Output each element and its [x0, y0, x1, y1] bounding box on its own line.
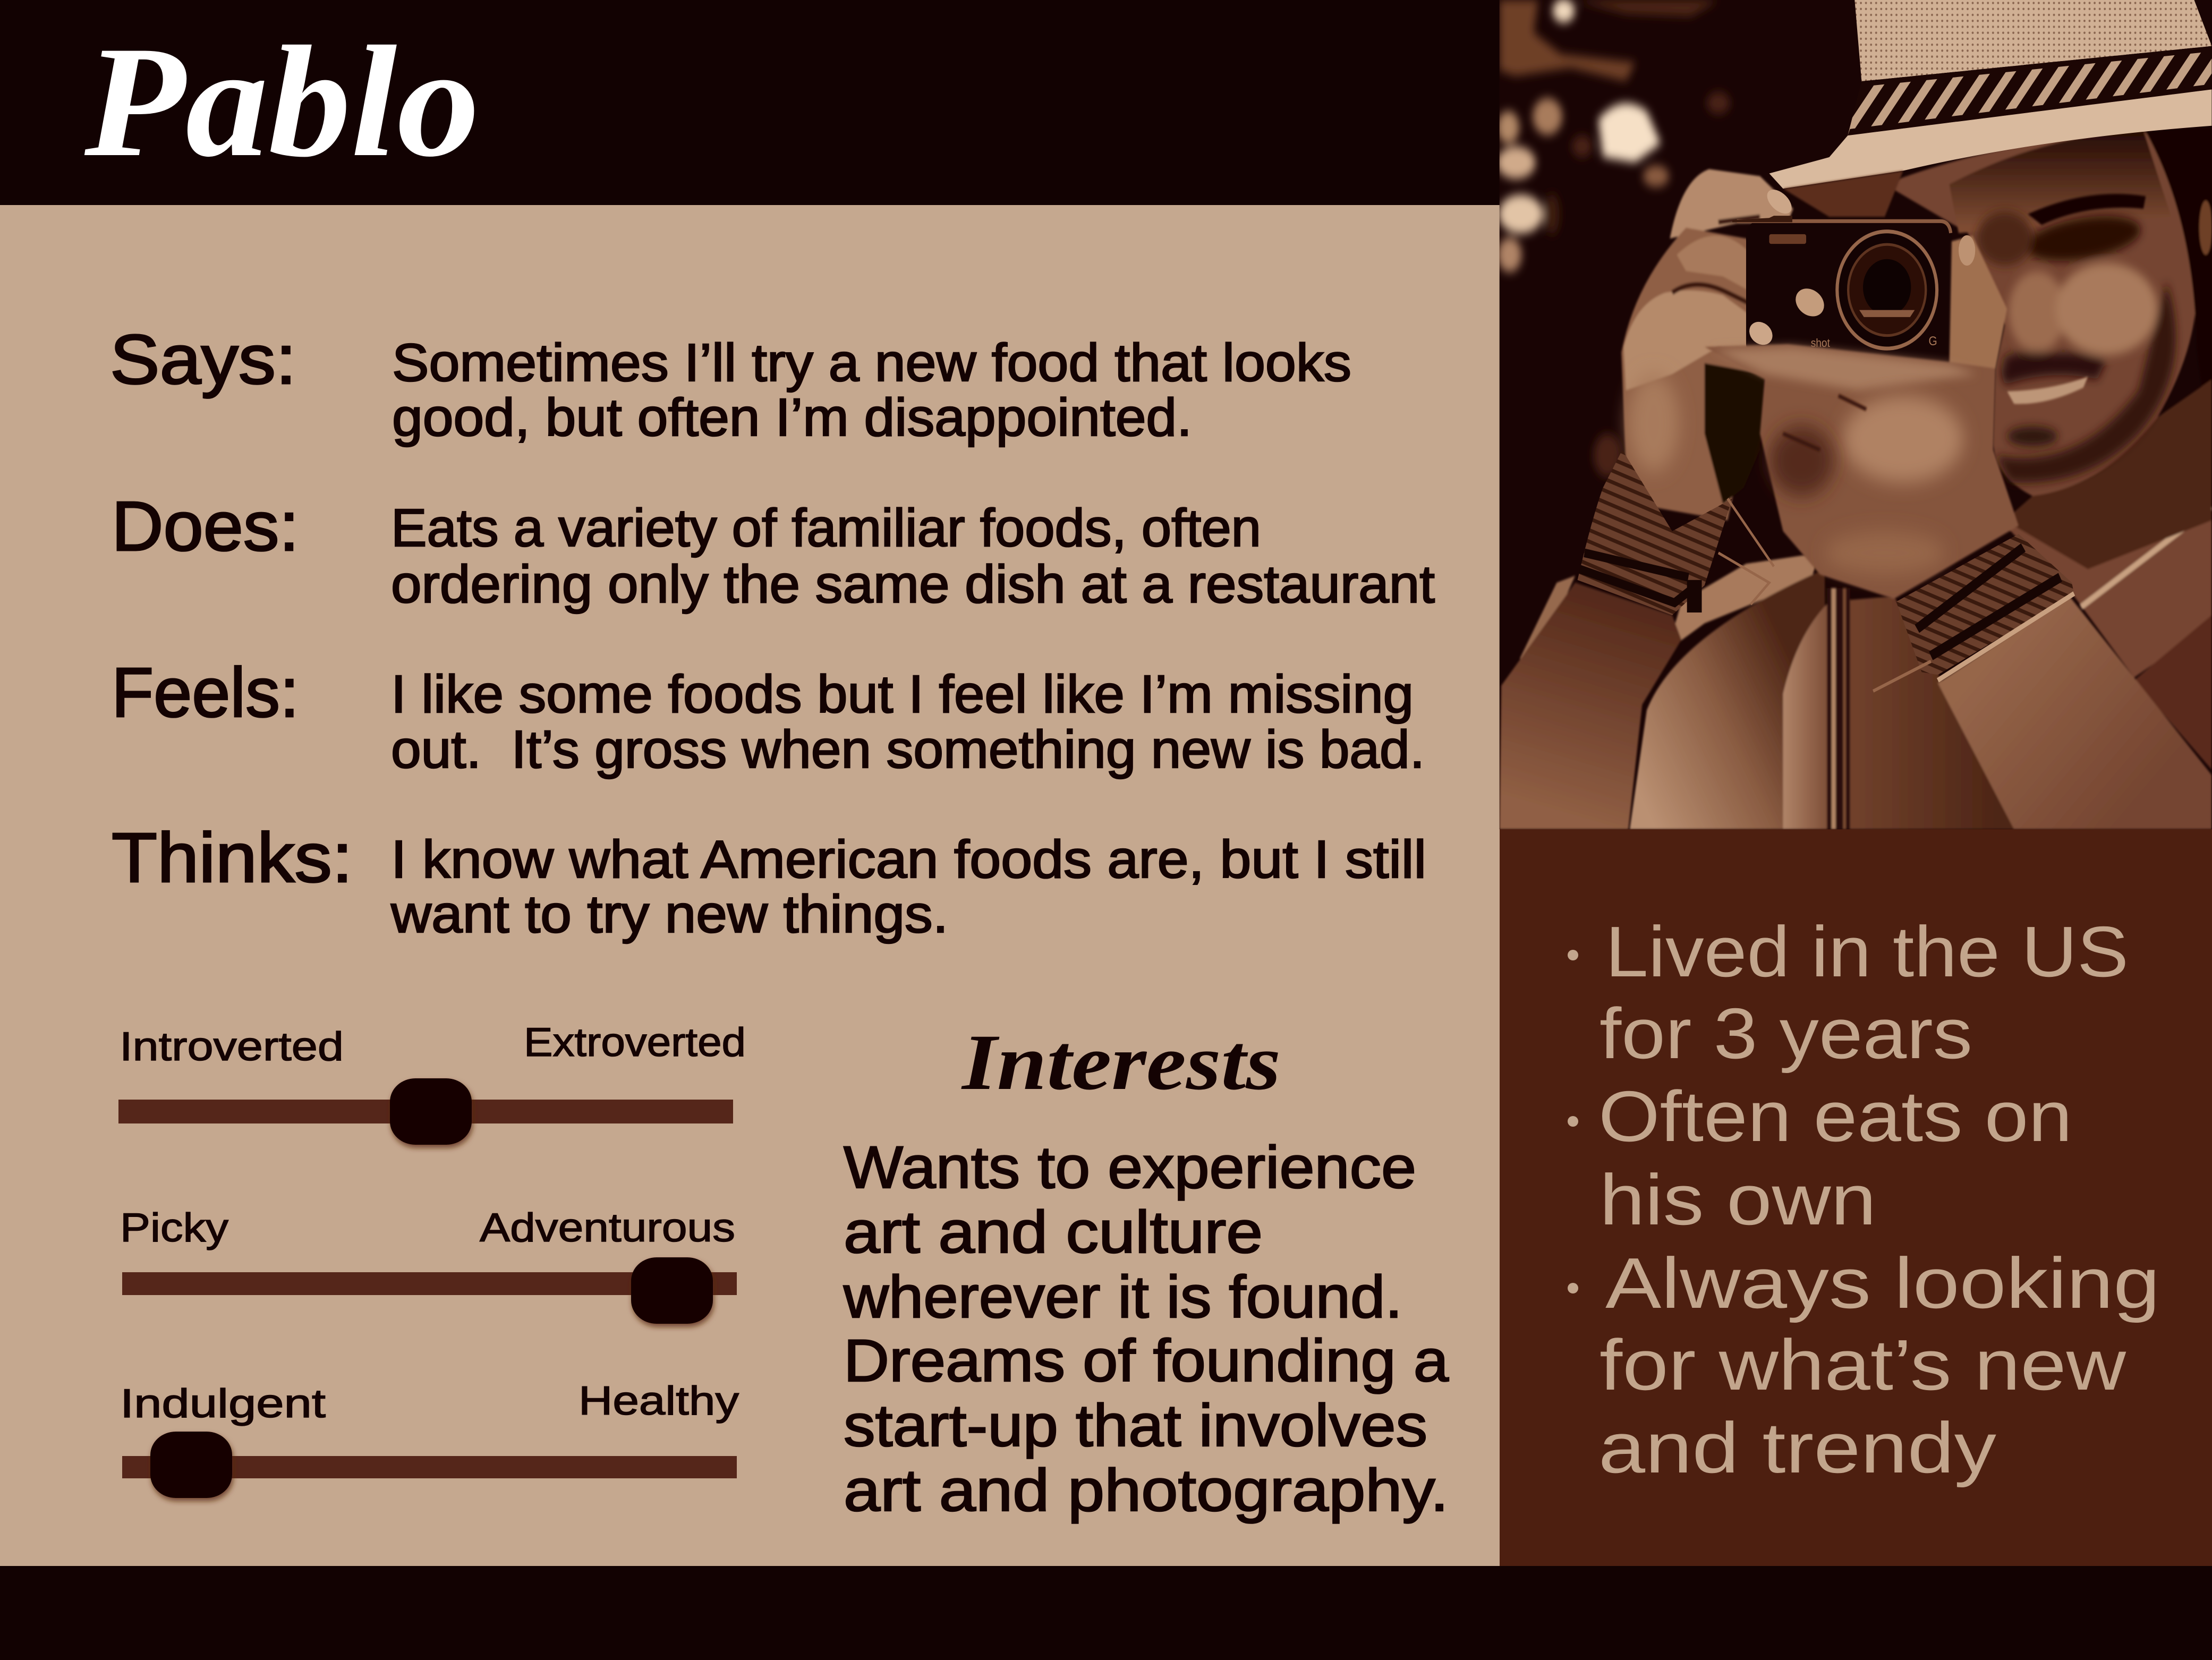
text: thinks: I know what American foods are, but I still [391, 830, 1426, 889]
slider handle: introverted to extroverted [390, 1078, 472, 1145]
bullet: new and trendy: and trendy [1598, 1408, 1997, 1488]
slider: picky to adventurous [120, 1205, 737, 1324]
text: does: Eats a variety of familiar foods, often [391, 498, 1261, 558]
bullet: new and trendy: Always looking [1605, 1243, 2160, 1323]
hands and camera: shot [1811, 337, 1830, 350]
bullet: eats on his own: his own [1600, 1160, 1876, 1240]
slider: introverted to extroverted: Introverted [120, 1024, 344, 1069]
bullet: eats on his own [1568, 1076, 2072, 1240]
text: interests: Wants to experience [844, 1134, 1416, 1201]
hat [1769, 0, 2212, 217]
text: feels: I like some foods but I feel like I’m missing [391, 665, 1414, 724]
bracelets [1578, 450, 2074, 691]
title: Pablo [82, 13, 480, 190]
slider handle: indulgent to healthy [150, 1432, 232, 1498]
slider handle: picky to adventurous [631, 1257, 713, 1324]
footer band [0, 1566, 2212, 1660]
slider: indulgent to healthy: Indulgent [120, 1381, 326, 1426]
panel: does [112, 487, 1435, 614]
hands and camera [1621, 169, 2019, 599]
bullet: new and trendy [1568, 1243, 2160, 1488]
panel: main content [0, 205, 1500, 1566]
text: thinks [390, 830, 1426, 944]
bullet: eats on his own: Often eats on [1598, 1076, 2072, 1156]
bullet: lived in the US [1568, 912, 2129, 1074]
panel: says [110, 320, 1351, 447]
header band [0, 0, 1500, 205]
slider: picky to adventurous: Picky [120, 1205, 228, 1250]
slider: picky to adventurous: Adventurous [480, 1205, 735, 1250]
bullet: lived in the US: for 3 years [1600, 993, 1972, 1074]
text: says: Sometimes I’ll try a new food that looks [392, 333, 1351, 393]
panel: feels [112, 653, 1425, 779]
heading: feels: Feels: [112, 653, 299, 731]
text: interests: wherever it is found. [843, 1264, 1402, 1330]
panel: thinks [112, 819, 1426, 944]
hands and camera: G [1928, 333, 1937, 348]
heading: thinks: Thinks: [112, 819, 353, 897]
photo: man with hat photographing [1496, 0, 2212, 829]
panel: biography list [1568, 912, 2160, 1488]
heading: interests: Interests [961, 1018, 1281, 1106]
bullet: new and trendy: for what’s new [1600, 1325, 2126, 1405]
text: does [391, 498, 1435, 614]
bullet: lived in the US: Lived in the US [1605, 912, 2129, 992]
panel: interests [843, 1018, 1449, 1523]
text: does: ordering only the same dish at a restaurant [391, 555, 1435, 614]
text: interests [843, 1134, 1449, 1523]
text: feels: out. It’s gross when something new is bad. [391, 720, 1425, 779]
text: interests: start-up that involves [844, 1392, 1427, 1459]
text: interests: Dreams of founding a [844, 1327, 1449, 1394]
text: says [392, 333, 1351, 447]
slider: introverted to extroverted: Extroverted [524, 1020, 746, 1065]
text: thinks: want to try new things. [390, 884, 948, 944]
slider: introverted to extroverted [118, 1020, 746, 1145]
text: interests: art and culture [844, 1199, 1263, 1265]
text: interests: art and photography. [844, 1457, 1449, 1523]
slider: indulgent to healthy [120, 1378, 739, 1498]
text: says: good, but often I’m disappointed. [392, 388, 1192, 447]
slider: indulgent to healthy: Healthy [578, 1378, 739, 1424]
text: feels [391, 665, 1425, 779]
heading: does: Does: [112, 487, 299, 565]
panel: biography background [1500, 829, 2212, 1566]
heading: says: Says: [110, 320, 296, 398]
